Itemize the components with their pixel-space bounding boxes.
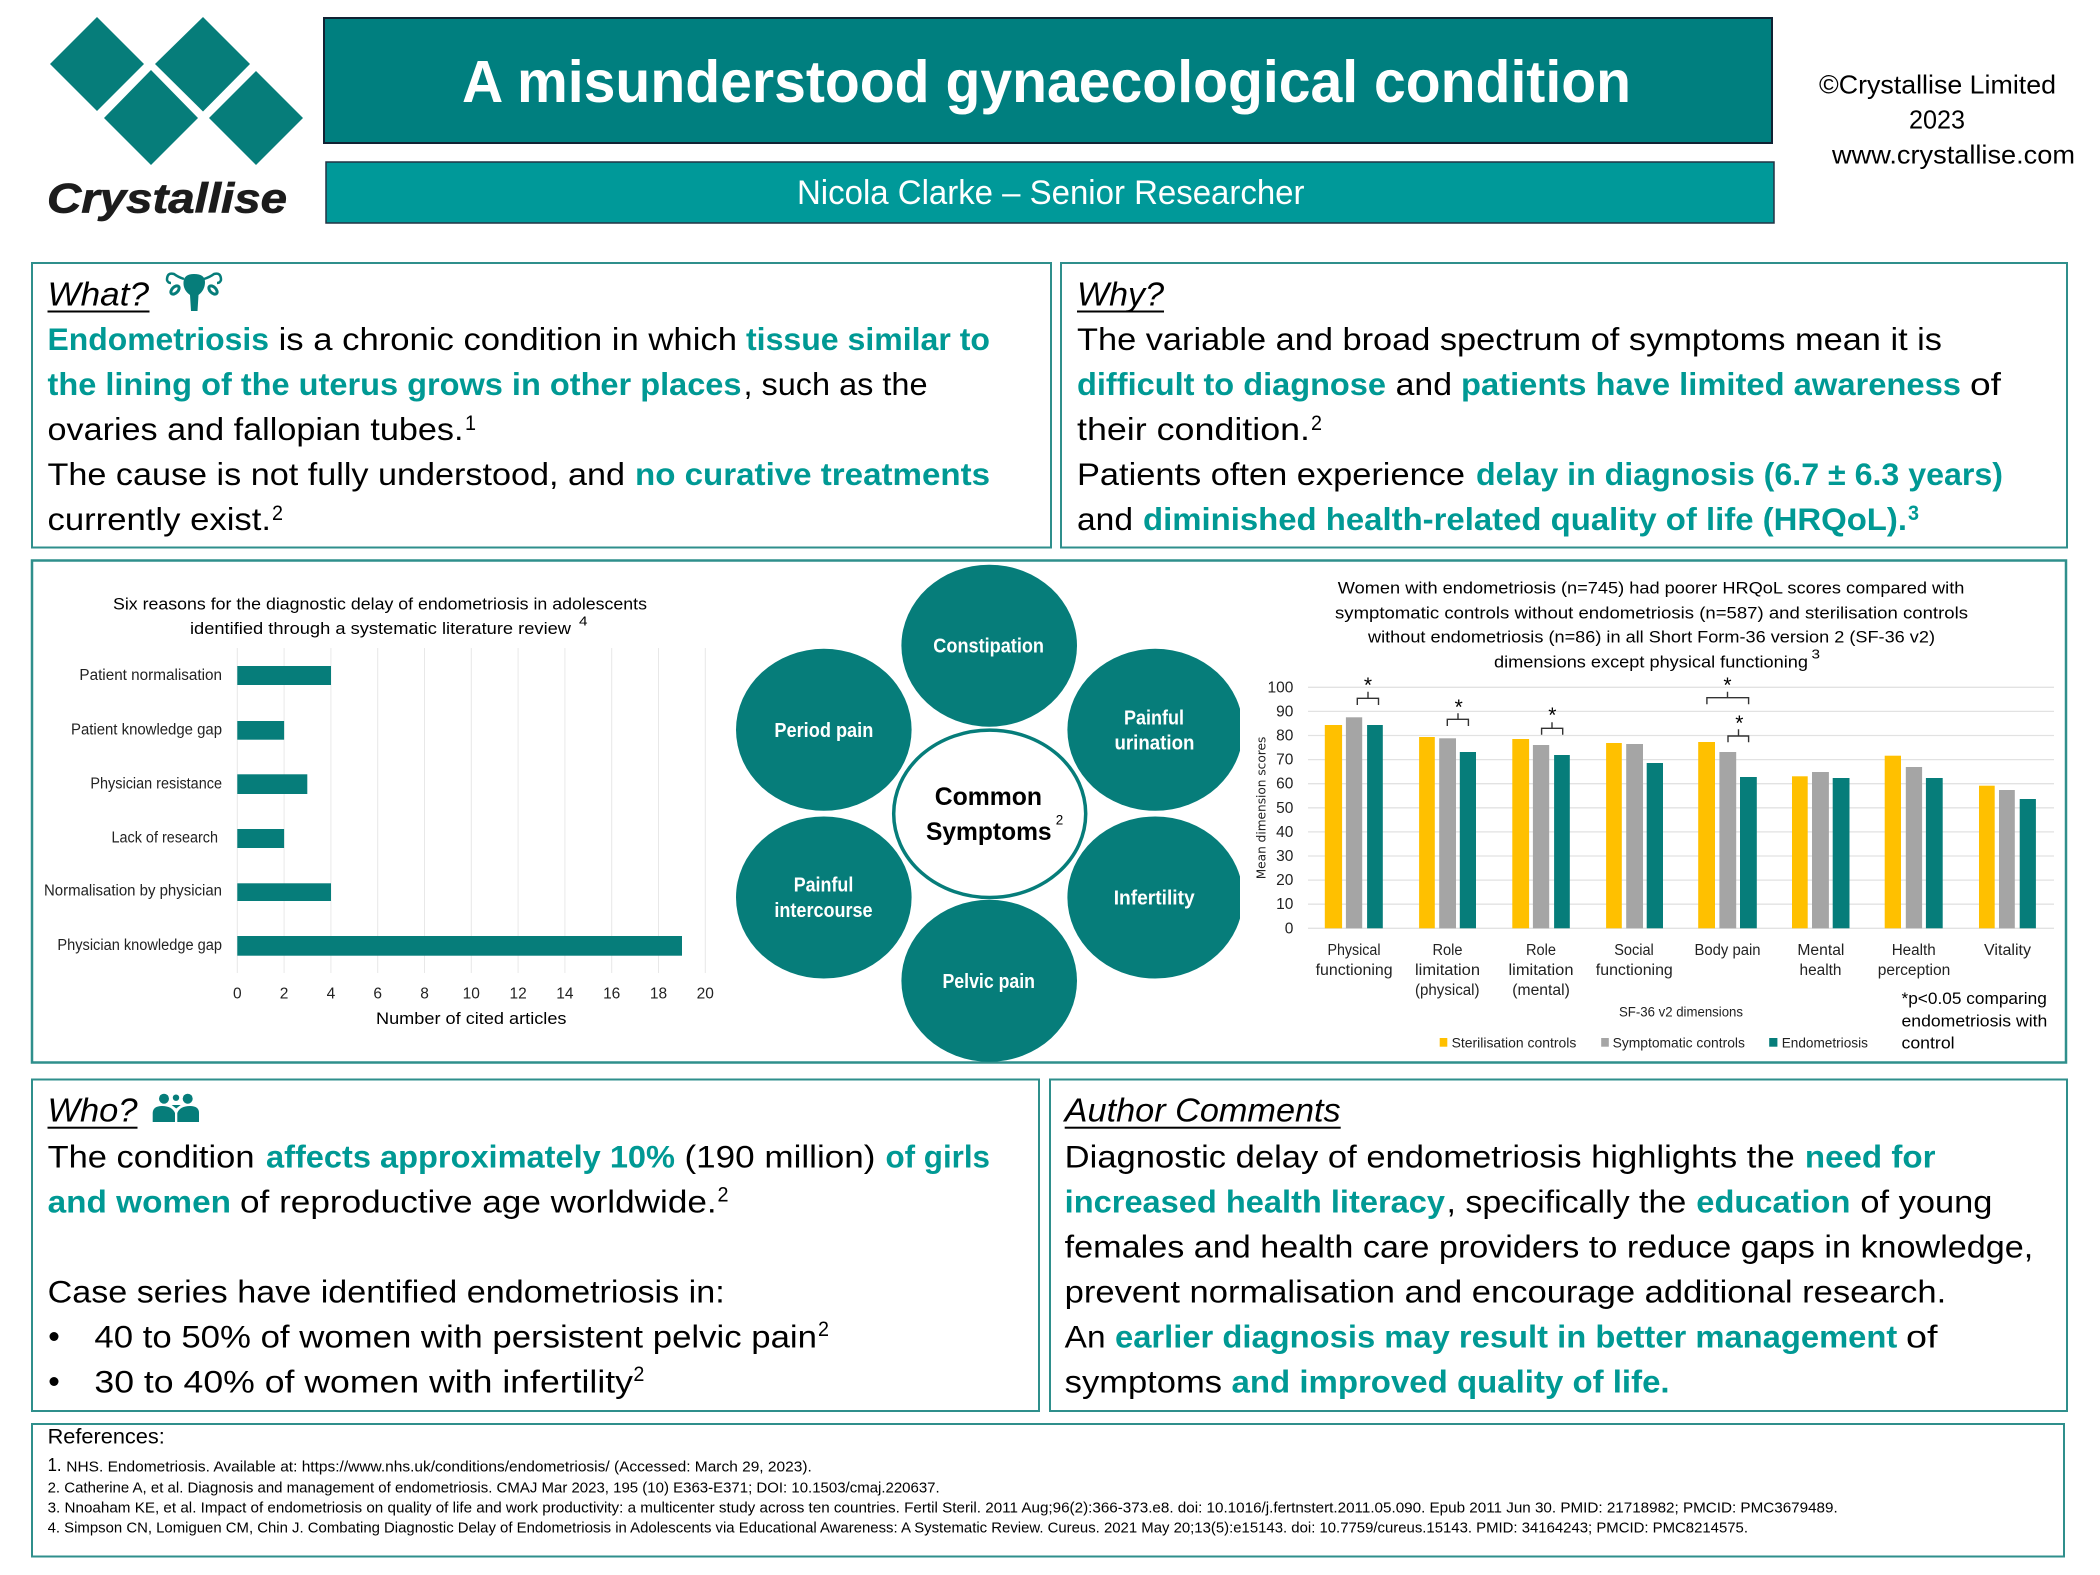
- chart title: HRQoL: dimensions except physical functioning: [1494, 652, 1808, 671]
- y axis labels: 90: [1276, 703, 1294, 720]
- y axis labels: 30: [1276, 848, 1294, 865]
- text block: why description: and: [1077, 501, 1133, 537]
- diagram: common symptoms: [736, 565, 1243, 1062]
- y axis labels: 100: [1268, 679, 1294, 696]
- text block: what description: currently exist.: [48, 501, 271, 537]
- y axis labels: 70: [1276, 752, 1294, 769]
- chart title: six reasons: 4: [579, 614, 588, 629]
- heading: Author Comments: Author Comments: [1063, 1092, 1341, 1129]
- text block: why description: delay in diagnosis (6.7 ± 6.3 years): [1476, 456, 2003, 492]
- note: significance: endometriosis with: [1902, 1012, 2047, 1031]
- category labels: Physical: [1328, 942, 1380, 959]
- x axis ticks: 0: [233, 985, 242, 1002]
- icon: uterus: [167, 274, 221, 311]
- text block: why description: their condition.: [1077, 411, 1310, 447]
- significance brackets: *: [1364, 674, 1372, 697]
- symptom: pelvic pain: Pelvic pain: [942, 971, 1035, 993]
- text block: who description: and women: [48, 1184, 231, 1220]
- note: significance: *p<0.05 comparing: [1902, 989, 2047, 1008]
- text block: what description: is a chronic condition in which: [279, 321, 737, 357]
- logo: Crystallise: [47, 17, 303, 222]
- text block: author comments: symptoms: [1065, 1363, 1222, 1399]
- text block: author comments: , specifically the: [1446, 1184, 1686, 1220]
- text block: who description: 2: [818, 1318, 829, 1341]
- text block: what description: [48, 321, 990, 537]
- symptom: constipation: [901, 565, 1077, 727]
- category labels: perception: [1878, 962, 1950, 979]
- significance brackets: *: [1723, 674, 1732, 697]
- category labels: functioning: [1316, 962, 1393, 979]
- y axis labels: 50: [1276, 800, 1294, 817]
- text block: who description: Case series have identified endometriosis in:: [48, 1274, 725, 1310]
- panel: Author Comments: [1050, 1080, 2067, 1411]
- symptom: painful intercourse: [736, 816, 912, 978]
- y axis title: Mean dimension scores: [1254, 737, 1268, 879]
- y axis labels: 60: [1276, 776, 1294, 793]
- chart title: HRQoL: [1335, 578, 1968, 671]
- x axis ticks: 18: [650, 985, 667, 1002]
- symptom: painful intercourse: Painful: [794, 875, 853, 897]
- category labels: Normalisation by physician: [44, 883, 222, 900]
- text block: author comments: An: [1065, 1318, 1106, 1354]
- references list: 3. Nnoaham KE, et al. Impact of endometriosis on quality of life and work productivity: a multicenter study across ten countries. Fertil Steril. 2011 Aug;96(2):366-373.e8. doi: 10.1016/j.fertnstert.2011.05.090. Epub 2011 Jun 30. PMID: 21718982; PMCID: PMC3679489.: [48, 1501, 1838, 1517]
- chart title: six reasons: identified through a systematic literature review: [190, 619, 572, 638]
- chart title: HRQoL: 3: [1812, 646, 1820, 661]
- text block: why description: 2: [1311, 412, 1322, 435]
- category labels: Role: [1526, 942, 1556, 959]
- heading: What?: What?: [48, 275, 150, 312]
- x axis ticks: 6: [373, 985, 382, 1002]
- text block: author comments: of young: [1860, 1184, 1992, 1220]
- significance brackets: [1357, 674, 1749, 742]
- y axis labels: 20: [1276, 872, 1294, 889]
- text block: what description: no curative treatments: [635, 456, 990, 492]
- category labels: [44, 667, 222, 954]
- chart title: HRQoL: symptomatic controls without endometriosis (n=587) and sterilisation controls: [1335, 603, 1968, 622]
- chart title: HRQoL: Women with endometriosis (n=745) had poorer HRQoL scores compared with: [1338, 578, 1964, 597]
- x axis ticks: [233, 985, 714, 1002]
- significance brackets: *: [1548, 704, 1556, 727]
- title banner: [324, 18, 1772, 143]
- text block: author comments: [1065, 1139, 2033, 1399]
- legend: [1440, 1034, 1868, 1050]
- centre: common symptoms: 2: [1056, 811, 1063, 827]
- text block: what description: tissue similar to: [746, 321, 990, 357]
- symptom: painful intercourse: intercourse: [774, 900, 873, 922]
- x axis ticks: 10: [463, 985, 480, 1002]
- category labels: Patient knowledge gap: [71, 721, 222, 738]
- category labels: Social: [1614, 942, 1654, 959]
- text block: what description: Endometriosis: [48, 321, 269, 357]
- note: significance: [1902, 989, 2047, 1052]
- text block: why description: and: [1396, 366, 1452, 402]
- text block: who description: The condition: [48, 1139, 254, 1175]
- category labels: functioning: [1596, 962, 1673, 979]
- text block: what description: The cause is not fully understood, and: [48, 456, 625, 492]
- category labels: limitation: [1508, 962, 1574, 979]
- chart title: six reasons: Six reasons for the diagnostic delay of endometriosis in adolescents: [113, 594, 647, 613]
- category labels: Mental: [1797, 942, 1844, 959]
- text block: why description: Patients often experience: [1077, 456, 1465, 492]
- copyright block: ©Crystallise Limited: [1819, 70, 2056, 100]
- bars: endometriosis: [1367, 725, 2036, 928]
- bar chart: reasons for diagnostic delay: [44, 594, 714, 1028]
- category labels: Physician resistance: [90, 775, 222, 792]
- symptom: infertility: [1067, 816, 1243, 978]
- subtitle banner: author: [326, 162, 1774, 223]
- text block: who description: 40 to 50% of women with persistent pelvic pain: [94, 1318, 817, 1354]
- symptom: painful urination: urination: [1114, 732, 1194, 754]
- panel: Why?: [1061, 263, 2067, 548]
- legend: Symptomatic controls: [1613, 1034, 1745, 1050]
- category labels: Role: [1432, 942, 1462, 959]
- logo: Crystallise: Crystallise: [47, 174, 287, 222]
- category labels: limitation: [1415, 962, 1480, 979]
- x axis ticks: 16: [603, 985, 620, 1002]
- category labels: Physician knowledge gap: [57, 937, 222, 954]
- text block: who description: (190 million): [684, 1139, 875, 1175]
- icon: people: [153, 1094, 199, 1122]
- copyright block: www.crystallise.com: [1831, 140, 2075, 170]
- text block: what description: 1: [465, 412, 476, 435]
- text block: why description: diminished health-related quality of life (HRQoL).: [1143, 501, 1907, 537]
- text block: who description: 2: [718, 1184, 728, 1207]
- text block: who description: of girls: [886, 1139, 990, 1175]
- legend: Endometriosis: [1782, 1034, 1868, 1050]
- bars: [237, 666, 682, 956]
- references list: 2. Catherine A, et al. Diagnosis and management of endometriosis. CMAJ Mar 2023, 195 (10) E363-E371; DOI: 10.1503/cmaj.220637.: [48, 1481, 940, 1497]
- text block: who description: affects approximately 10%: [266, 1139, 675, 1175]
- panel: Who?: [32, 1080, 1039, 1411]
- category labels: (physical): [1415, 982, 1480, 999]
- text block: who description: 2: [633, 1363, 644, 1386]
- legend: Sterilisation controls: [1452, 1034, 1576, 1050]
- x axis ticks: 14: [556, 985, 574, 1002]
- text block: what description: the lining of the uterus grows in other places: [48, 366, 742, 402]
- centre: common symptoms: Common: [935, 783, 1042, 811]
- copyright block: [1819, 70, 2075, 170]
- panel: references: [32, 1424, 2064, 1556]
- significance brackets: *: [1455, 696, 1463, 719]
- panel: charts and symptoms: [32, 560, 2066, 1062]
- category labels: (mental): [1512, 982, 1570, 999]
- text block: who description: of reproductive age worldwide.: [240, 1184, 717, 1220]
- text block: who description: [48, 1139, 990, 1399]
- bars: symptomatic controls: [1346, 717, 2015, 928]
- text block: author comments: Diagnostic delay of endometriosis highlights the: [1065, 1139, 1795, 1175]
- category labels: Vitality: [1984, 942, 2031, 959]
- text block: why description: 3: [1908, 502, 1919, 525]
- x axis title: SF-36 v2 dimensions: [1619, 1004, 1743, 1020]
- text block: author comments: of: [1906, 1318, 1938, 1354]
- text block: author comments: education: [1696, 1184, 1850, 1220]
- y axis labels: 10: [1276, 896, 1294, 913]
- category labels: health: [1800, 962, 1842, 979]
- text block: what description: , such as the: [744, 366, 928, 402]
- bar chart: HRQoL scores: [1254, 578, 2054, 1052]
- symptom: painful urination: Painful: [1124, 707, 1184, 729]
- text block: why description: [1077, 321, 2003, 537]
- title banner: A misunderstood gynaecological condition: [462, 49, 1631, 115]
- symptom: infertility: Infertility: [1114, 887, 1196, 909]
- text block: why description: difficult to diagnose: [1077, 366, 1386, 402]
- panel: What?: [32, 263, 1051, 548]
- text block: author comments: prevent normalisation and encourage additional research.: [1065, 1274, 1946, 1310]
- centre: common symptoms: [894, 730, 1086, 898]
- y axis labels: 40: [1276, 824, 1294, 841]
- references heading: References:: [48, 1425, 165, 1448]
- text block: what description: ovaries and fallopian tubes.: [48, 411, 464, 447]
- category labels: Lack of research: [112, 830, 218, 847]
- chart title: HRQoL: without endometriosis (n=86) in all Short Form-36 version 2 (SF-36 v2): [1367, 628, 1935, 647]
- references list: 4. Simpson CN, Lomiguen CM, Chin J. Combating Diagnostic Delay of Endometriosis in Adolescents via Educational Awareness: A Systematic Review. Cureus. 2021 May 20;13(5):e15143. doi: 10.7759/cureus.15143. PMID: 34164243; PMCID: PMC8214575.: [48, 1521, 1748, 1537]
- copyright block: 2023: [1909, 104, 1965, 134]
- x axis ticks: 8: [420, 985, 429, 1002]
- heading: Who?: Who?: [48, 1092, 138, 1129]
- text block: author comments: and improved quality of life.: [1232, 1363, 1670, 1399]
- chart title: six reasons: [113, 594, 647, 638]
- references list: [48, 1455, 1838, 1537]
- text block: why description: The variable and broad spectrum of symptoms mean it is: [1077, 321, 1942, 357]
- category labels: [1316, 942, 2031, 999]
- category labels: Patient normalisation: [79, 667, 222, 684]
- text block: why description: patients have limited awareness: [1461, 366, 1961, 402]
- symptom: painful urination: [1067, 649, 1243, 811]
- x axis ticks: 20: [697, 985, 714, 1002]
- text block: who description: 30 to 40% of women with infertility: [94, 1363, 633, 1399]
- references list: NHS. Endometriosis. Available at: https://www.nhs.uk/conditions/endometriosis/ (Accessed: March 29, 2023).: [66, 1460, 812, 1476]
- note: significance: control: [1902, 1033, 1955, 1052]
- text block: author comments: females and health care providers to reduce gaps in knowledge,: [1065, 1229, 2033, 1265]
- category labels: Health: [1892, 942, 1936, 959]
- y axis labels: 0: [1285, 920, 1294, 937]
- x axis ticks: 2: [280, 985, 288, 1002]
- symptom: period pain: Period pain: [774, 720, 873, 742]
- text block: author comments: earlier diagnosis may result in better management: [1115, 1318, 1898, 1354]
- significance brackets: *: [1735, 712, 1743, 735]
- x axis title: Number of cited articles: [376, 1009, 566, 1028]
- text block: author comments: need for: [1805, 1139, 1936, 1175]
- text block: what description: 2: [272, 502, 283, 525]
- centre: common symptoms: Symptoms: [926, 818, 1052, 846]
- subtitle banner: author: Nicola Clarke – Senior Researcher: [797, 174, 1304, 212]
- text block: author comments: increased health literacy: [1065, 1184, 1445, 1220]
- x axis ticks: 12: [509, 985, 527, 1002]
- symptom: period pain: [736, 649, 912, 811]
- bars: sterilisation controls: [1325, 725, 1995, 928]
- heading: Why?: Why?: [1077, 275, 1165, 312]
- text block: why description: of: [1970, 366, 2001, 402]
- y axis labels: [1268, 679, 1294, 937]
- category labels: Body pain: [1694, 942, 1760, 959]
- symptom: pelvic pain: [901, 900, 1077, 1062]
- y axis labels: 80: [1276, 728, 1294, 744]
- references list: 1.: [48, 1455, 62, 1475]
- symptom: constipation: Constipation: [933, 636, 1044, 658]
- x axis ticks: 4: [327, 985, 336, 1002]
